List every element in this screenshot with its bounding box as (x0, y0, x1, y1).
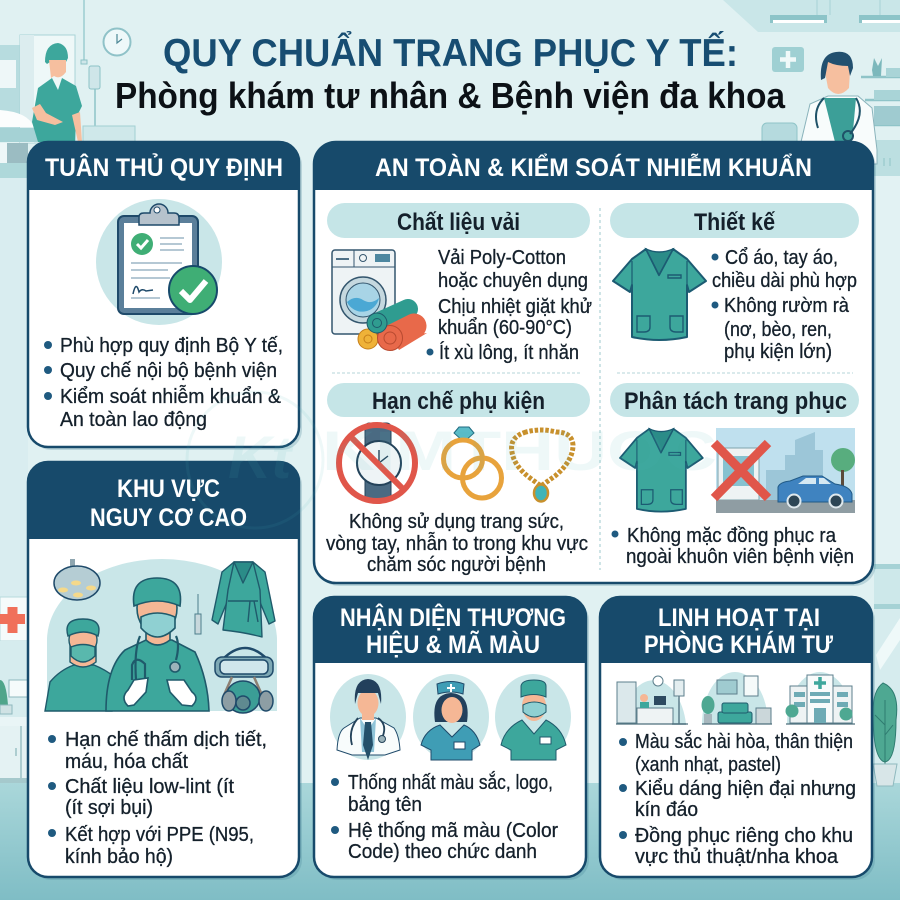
panel: khu vực nguy cơ cao (28, 462, 302, 880)
text block (326, 511, 588, 576)
title (115, 30, 786, 116)
bullet list: Kiểm soát nhiễm khuẩn & (60, 385, 282, 408)
icon: goggles and respirator (215, 648, 273, 713)
icon: surgical gown (212, 562, 275, 637)
heading: LINH HOẠT TẠI (658, 604, 820, 632)
heading (28, 462, 299, 539)
bullet list: bảng tên (348, 794, 422, 816)
section: chất liệu vải (327, 203, 592, 364)
icon: nurse avatar (413, 674, 489, 760)
watermark: KIMTHUOC (322, 419, 717, 482)
text block: ngoài khuôn viên bệnh viện (626, 546, 854, 568)
bullet list: Chất liệu low-lint (ít (65, 776, 234, 798)
bullet list: (xanh nhạt, pastel) (635, 754, 781, 776)
bullet list: Code) theo chức danh (348, 841, 537, 863)
panel: linh hoạt tại phòng khám tư (600, 597, 875, 880)
icon: clinic room (616, 676, 688, 724)
bullet list: Hạn chế thấm dịch tiết, (65, 729, 267, 751)
icon: rings (444, 427, 502, 498)
surgeon main (106, 578, 209, 711)
bullet list: (ít sợi bụi) (65, 797, 153, 819)
heading: NHẬN DIỆN THƯƠNG (340, 602, 566, 632)
icon: no watch (339, 423, 415, 501)
clock icon (104, 28, 130, 56)
heading: NGUY CƠ CAO (90, 504, 247, 532)
text block: chiều dài phù hợp (712, 270, 857, 292)
text block: chăm sóc người bệnh (367, 554, 546, 576)
panel: an toàn và kiểm soát nhiễm khuẩn (314, 142, 876, 586)
icon: needle tool (195, 594, 201, 634)
illustration: surgical team and PPE (45, 559, 277, 713)
bullet list: An toàn lao động (60, 409, 207, 431)
text block (426, 247, 592, 364)
text block: khuẩn (60-90°C) (438, 317, 572, 339)
heading (314, 142, 873, 190)
subheading pill: Thiết kế (694, 209, 776, 236)
title: QUY CHUẨN TRANG PHỤC Y TẾ: (163, 30, 738, 75)
icon: necklace (512, 430, 573, 502)
heading: HIỆU & MÃ MÀU (366, 629, 540, 659)
icon: hospital building (786, 672, 855, 724)
panel: nhận diện thương hiệu và mã màu (314, 597, 589, 880)
text block (712, 247, 857, 363)
bullet list: Quy chế nội bộ bệnh viện (60, 360, 277, 382)
subheading pill: Hạn chế phụ kiện (372, 388, 545, 415)
heading (314, 597, 586, 663)
icon: washing machine and towels (332, 250, 427, 350)
subheading pill: Phân tách trang phục (624, 388, 847, 415)
illustration: outdoor scene crossed out (714, 428, 855, 513)
icon: clipboard with check (96, 199, 222, 325)
bullet list (619, 730, 856, 868)
subheading pill: Chất liệu vải (397, 209, 520, 236)
text block: Vải Poly-Cotton (438, 247, 566, 269)
watermark (187, 392, 717, 528)
surgeon small (45, 619, 113, 711)
text block: Không sử dụng trang sức, (349, 511, 564, 533)
text block: Chịu nhiệt giặt khử (438, 296, 592, 318)
bullet list: kính bảo hộ) (65, 846, 173, 868)
bullet list: Màu sắc hài hòa, thân thiện (635, 730, 853, 753)
text block: hoặc chuyên dụng (438, 270, 588, 292)
text block: Cổ áo, tay áo, (725, 247, 838, 269)
text block (612, 525, 854, 568)
bullet list: vực thủ thuật/nha khoa (635, 846, 839, 868)
heading (28, 142, 299, 190)
bullet list: Kết hợp với PPE (N95, (65, 824, 254, 846)
text block: phụ kiện lớn) (724, 341, 832, 363)
section: thiết kế (610, 203, 859, 363)
icon: surgeon avatar (495, 674, 571, 760)
text block: vòng tay, nhẫn to trong khu vực (326, 532, 588, 555)
icon: scrub shirt (620, 429, 703, 512)
text block: Không mặc đồng phục ra (627, 525, 837, 547)
bullet list: kín đáo (635, 799, 698, 821)
panel: tuân thủ quy định (28, 142, 302, 450)
text block: Không rườm rà (724, 295, 850, 317)
heading: KHU VỰC (117, 475, 220, 503)
bullet list (48, 729, 267, 868)
section: phân tách trang phục (610, 383, 859, 568)
text block: (nơ, bèo, ren, (724, 319, 832, 341)
heading: AN TOÀN & KIỂM SOÁT NHIỄM KHUẨN (375, 152, 812, 182)
heading: PHÒNG KHÁM TƯ (644, 629, 833, 659)
doctor figure (801, 52, 877, 164)
icon: clinic lounge (702, 672, 772, 724)
bullet list (44, 335, 283, 431)
heading: TUÂN THỦ QUY ĐỊNH (45, 152, 283, 182)
bullet list: máu, hóa chất (65, 751, 188, 773)
bullet list: Kiểu dáng hiện đại nhưng (635, 778, 856, 800)
text block: Ít xù lông, ít nhăn (439, 341, 579, 364)
bullet list (331, 771, 558, 863)
section: hạn chế phụ kiện (326, 383, 590, 576)
nurse figure (32, 43, 82, 142)
subheading pill (610, 203, 859, 238)
bullet list: Đồng phục riêng cho khu (635, 825, 853, 847)
subheading pill (327, 383, 590, 417)
title: Phòng khám tư nhân & Bệnh viện đa khoa (115, 75, 786, 116)
bullet list: Thống nhất màu sắc, logo, (348, 771, 553, 794)
subheading pill (327, 203, 590, 238)
icon: surgical lamp (54, 559, 100, 600)
icon: scrub shirt (613, 249, 706, 340)
bullet list: Phù hợp quy định Bộ Y tế, (60, 335, 283, 357)
watermark: Kt (228, 424, 294, 491)
bullet list: Hệ thống mã màu (Color (348, 820, 558, 842)
heading (600, 597, 872, 663)
icon: doctor avatar (330, 674, 406, 760)
